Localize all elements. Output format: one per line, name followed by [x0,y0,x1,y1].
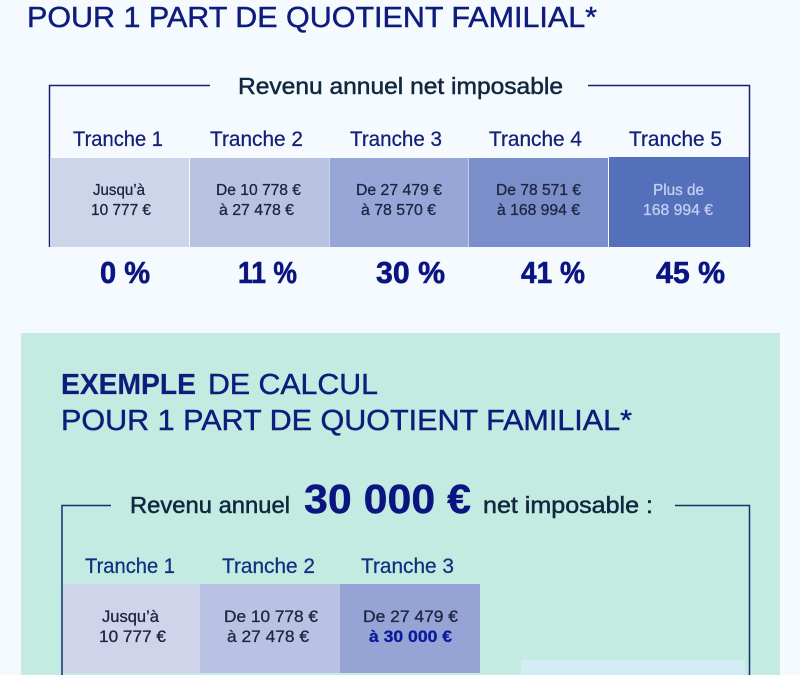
cell: tranche 5: 168 994 € [643,202,713,219]
panel background [21,333,780,675]
cell: tranche 3: De 27 479 € [363,608,458,626]
tranche labels: Tranche 1 [85,555,175,578]
cell: tranche 2: à 27 478 € [219,202,294,219]
cell: tranche 3 [330,158,468,247]
tranche labels [85,555,454,578]
bracket frame [50,86,750,247]
heading: example of calculation: EXEMPLE [61,369,196,401]
cell: tranche 3 [340,584,480,673]
income heading: net imposable : [483,492,653,518]
tax rates [100,255,725,290]
tranche labels: Tranche 2 [222,555,315,578]
tax rates: 11 % [238,255,297,290]
heading: example of calculation: POUR 1 PART DE QUOTIENT FAMILIAL* [61,405,632,437]
panel: income brackets [50,73,750,290]
tranche labels: Tranche 3 [361,555,454,578]
cell: tranche 1: 10 777 € [91,202,151,219]
cell: tranche 1: Jusqu’à [93,182,145,199]
tranche labels: Tranche 5 [629,128,722,151]
cell: tranche 1: Jusqu’à [102,608,160,626]
cell: tranche 3: à 30 000 € [369,628,452,646]
cell: tranche 1 [63,584,200,673]
cell: tranche 4: à 168 994 € [497,202,580,219]
cell: tranche 2: De 10 778 € [224,608,318,626]
tax rates: 45 % [656,255,725,290]
cell: tranche 1 [50,158,189,247]
cell: tranche 2: De 10 778 € [216,182,301,199]
tax rates: 41 % [521,255,585,290]
income heading: 30 000 € [304,476,471,522]
cell: tranche 5: Plus de [653,182,704,199]
panel: calculation example [21,333,780,675]
heading: example of calculation: DE CALCUL [208,369,378,401]
tranche labels [73,128,722,151]
cell: tranche 3: à 78 570 € [361,202,436,219]
income heading: Revenu annuel [130,492,290,518]
bracket frame [62,506,750,675]
cell: tranche 3: De 27 479 € [356,182,442,199]
tranche labels: Tranche 4 [489,128,582,151]
heading: net taxable annual income: Revenu annuel net imposable [238,73,563,99]
cell: tranche 2 [190,158,329,247]
tax rates: 0 % [100,255,150,290]
cell: tranche 4 [469,158,608,247]
cell: tranche 4: De 78 571 € [496,182,581,199]
tranche labels: Tranche 2 [210,128,303,151]
cell: tranche 5 [609,157,749,247]
title: top section: POUR 1 PART DE QUOTIENT FAMILIAL* [27,2,597,34]
cell: tranche 2 [200,584,340,673]
income heading [130,476,653,522]
tax rates: 30 % [376,255,445,290]
light blue result box [521,660,745,675]
tranche labels: Tranche 1 [73,128,163,151]
heading: example of calculation [61,369,632,437]
cell: tranche 2: à 27 478 € [227,628,309,646]
tranche labels: Tranche 3 [350,128,442,151]
cell: tranche 1: 10 777 € [99,628,166,646]
